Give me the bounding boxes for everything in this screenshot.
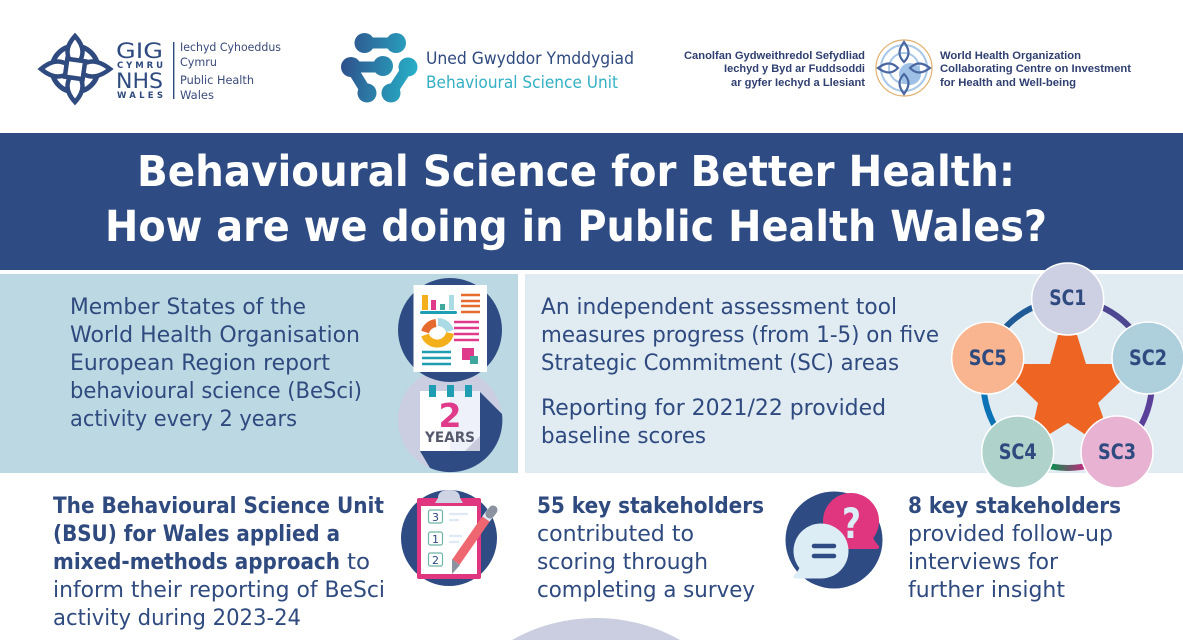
text: interview stakeholders: interviews for bbox=[908, 550, 1059, 575]
SC1: SC1 bbox=[1049, 286, 1086, 310]
diagram: five strategic commitments bbox=[952, 263, 1183, 488]
text: mixed-methods approach: inform their reporting of BeSci bbox=[53, 578, 385, 603]
reporting text: European Region report bbox=[70, 351, 330, 376]
text: survey stakeholders: contributed to bbox=[537, 522, 694, 547]
text: mixed-methods approach: The Behavioural Science Unit bbox=[53, 494, 384, 519]
NHS Wales wordmark: GIG bbox=[116, 39, 163, 63]
icon: report document bbox=[398, 278, 502, 382]
text: survey stakeholders: completing a survey bbox=[537, 578, 755, 603]
unit name: Uned Gwyddor Ymddygiad bbox=[426, 49, 634, 68]
text: mixed-methods approach: activity during 2023-24 bbox=[53, 606, 301, 631]
icon: speech bubbles: ? bbox=[842, 499, 861, 548]
NHS Wales wordmark: NHS bbox=[116, 69, 163, 93]
SC2 bbox=[1112, 322, 1183, 394]
assessment text: measures progress (from 1-5) on five bbox=[541, 323, 939, 348]
title: Behavioural Science for Better Health: bbox=[137, 147, 1015, 197]
NHS Wales wordmark: WALES bbox=[117, 91, 163, 101]
reporting text: World Health Organisation bbox=[70, 323, 360, 348]
English name: Collaborating Centre on Investment bbox=[940, 63, 1131, 75]
reporting text: Member States of the bbox=[70, 295, 306, 320]
English name: for Health and Well-being bbox=[940, 77, 1076, 89]
NHS Wales wordmark: CYMRU bbox=[117, 61, 163, 71]
reporting text bbox=[70, 295, 362, 432]
assessment text bbox=[541, 295, 939, 449]
SC3 bbox=[1081, 416, 1153, 488]
text: interview stakeholders: 8 key stakeholders bbox=[908, 494, 1121, 519]
text: interview stakeholders bbox=[908, 494, 1121, 603]
assessment text: An independent assessment tool bbox=[541, 295, 897, 320]
organisation name: Cymru bbox=[180, 55, 217, 69]
icon: WHO emblem bbox=[876, 40, 932, 96]
SC3: SC3 bbox=[1098, 440, 1136, 464]
title: How are we doing in Public Health Wales? bbox=[105, 202, 1047, 252]
text: survey stakeholders: scoring through bbox=[537, 550, 708, 575]
SC4: SC4 bbox=[999, 440, 1037, 464]
Welsh name bbox=[684, 50, 865, 89]
text: mixed-methods approach bbox=[53, 494, 385, 631]
organisation name bbox=[180, 40, 281, 102]
icon: calendar 2 years: 2 bbox=[439, 396, 461, 435]
icon: speech bubbles bbox=[786, 492, 882, 588]
SC5 bbox=[952, 322, 1024, 394]
logo: Behavioural Science Unit bbox=[341, 33, 634, 102]
SC5: SC5 bbox=[969, 346, 1007, 370]
logo: WHO Collaborating Centre bbox=[684, 40, 1131, 96]
English name: World Health Organization bbox=[940, 50, 1081, 62]
logo: GIG Cymru NHS Wales bbox=[41, 36, 281, 102]
unit name bbox=[426, 49, 634, 92]
text: interview stakeholders: provided follow-up bbox=[908, 522, 1113, 547]
panel: WHO reporting bbox=[0, 274, 518, 473]
assessment text: Strategic Commitment (SC) areas bbox=[541, 351, 899, 376]
icon: calendar 2 years bbox=[398, 368, 502, 472]
text: mixed-methods approach: mixed-methods approach bbox=[53, 550, 340, 575]
text: survey stakeholders: 55 key stakeholders bbox=[537, 494, 764, 519]
title bbox=[105, 147, 1047, 252]
organisation name: Public Health bbox=[180, 73, 254, 87]
ring bbox=[984, 300, 1152, 468]
text: mixed-methods approach: to bbox=[347, 550, 370, 575]
SC2: SC2 bbox=[1129, 346, 1167, 370]
panel: assessment tool bbox=[525, 274, 1183, 473]
icon: molecule mark bbox=[341, 33, 418, 102]
assessment text: baseline scores bbox=[541, 424, 706, 449]
icon: Celtic knot emblem bbox=[41, 36, 110, 102]
icon: clipboard with pencil: 3 bbox=[432, 511, 439, 524]
organisation name: Wales bbox=[180, 88, 214, 102]
text: mixed-methods approach: (BSU) for Wales applied a bbox=[53, 522, 340, 547]
icon: calendar 2 years: YEARS bbox=[424, 430, 475, 446]
text: interview stakeholders: further insight bbox=[908, 578, 1065, 603]
Welsh name: ar gyfer Iechyd a Llesiant bbox=[731, 77, 865, 89]
icon: clipboard with pencil: 1 bbox=[432, 533, 439, 546]
text: survey stakeholders bbox=[537, 494, 764, 603]
icon: clipboard with pencil bbox=[401, 490, 497, 586]
assessment text: Reporting for 2021/22 provided bbox=[541, 396, 886, 421]
decorative circle: next section bbox=[512, 618, 680, 640]
Welsh name: Iechyd y Byd ar Fuddsoddi bbox=[724, 63, 865, 75]
organisation name: Iechyd Cyhoeddus bbox=[180, 40, 281, 54]
title banner bbox=[0, 133, 1183, 270]
NHS Wales wordmark bbox=[116, 39, 163, 101]
unit name: Behavioural Science Unit bbox=[426, 73, 618, 92]
reporting text: behavioural science (BeSci) bbox=[70, 379, 362, 404]
icon: clipboard with pencil: 2 bbox=[432, 554, 439, 567]
icon: orange star bbox=[1016, 335, 1120, 437]
SC1 bbox=[1032, 263, 1104, 335]
Welsh name: Canolfan Gydweithredol Sefydliad bbox=[684, 50, 865, 62]
reporting text: activity every 2 years bbox=[70, 407, 297, 432]
English name bbox=[940, 50, 1131, 89]
SC4 bbox=[982, 416, 1054, 488]
